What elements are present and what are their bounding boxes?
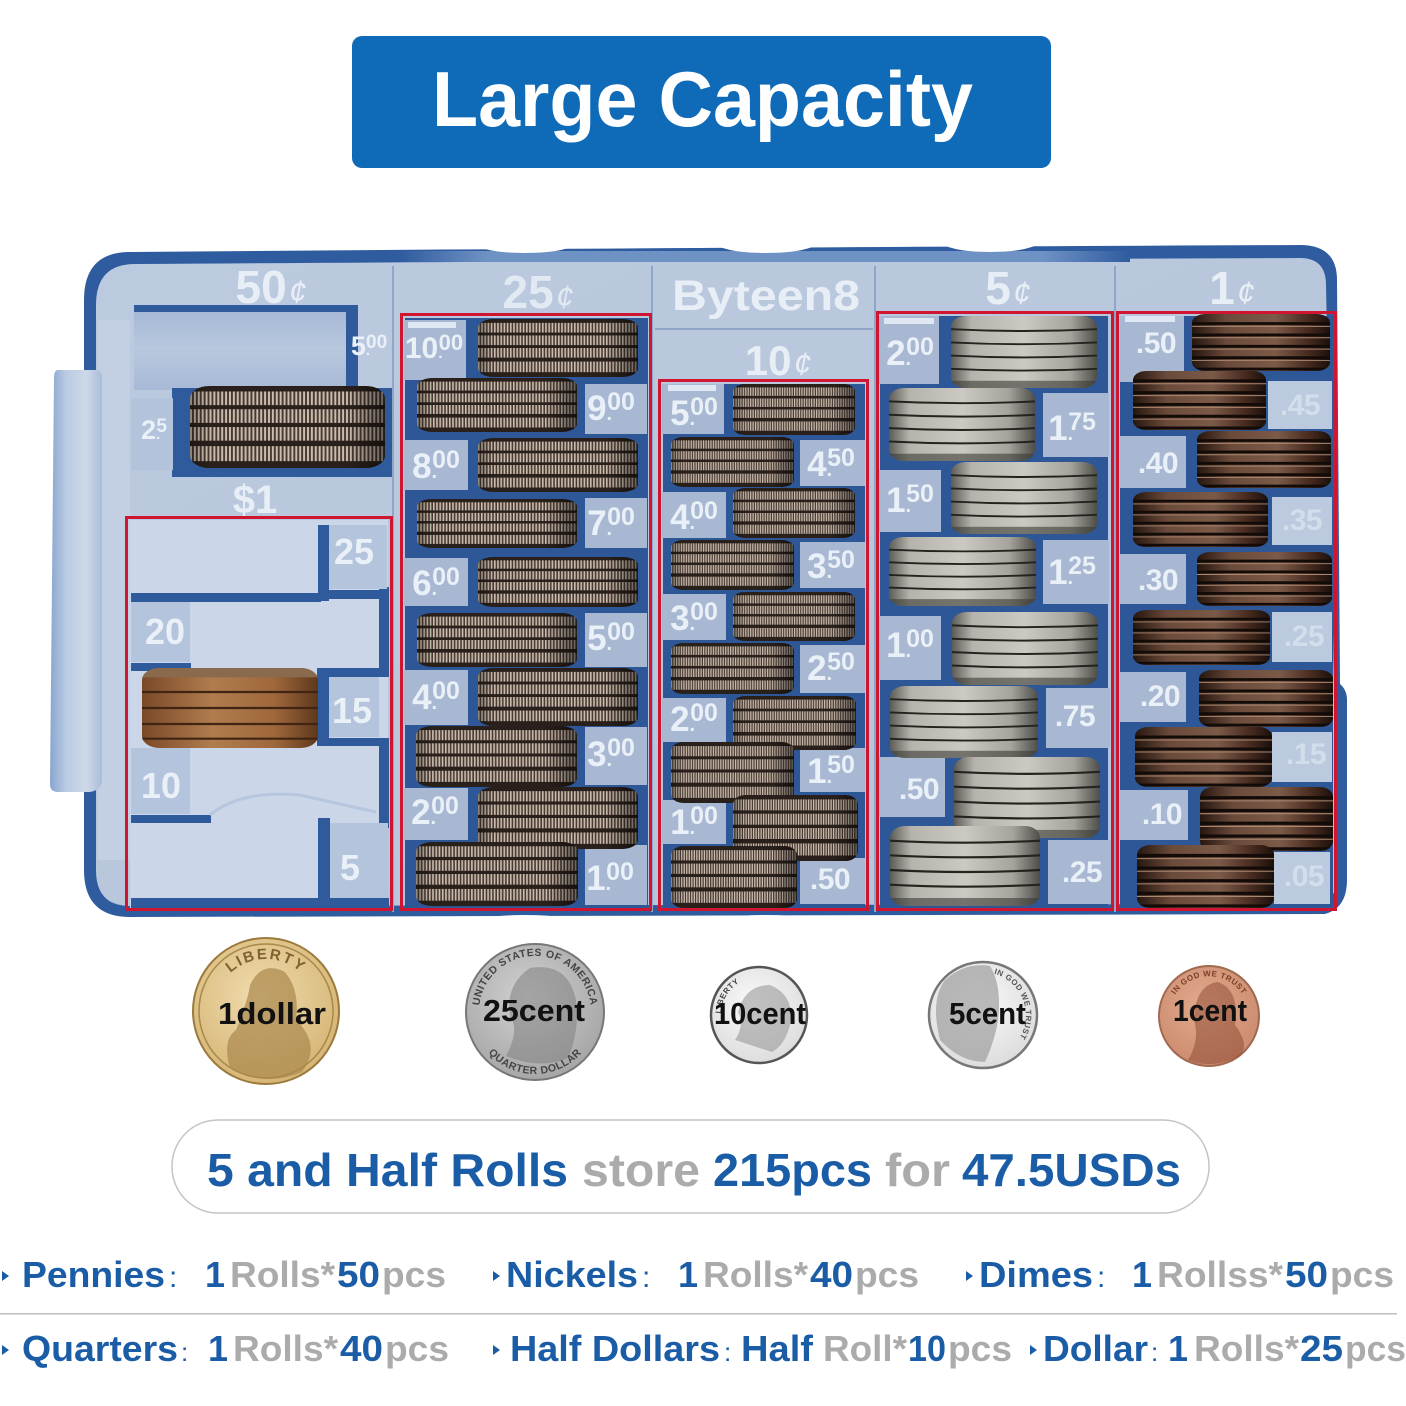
title banner: Large Capacity xyxy=(432,55,973,143)
value labels: 1. xyxy=(670,803,695,842)
value labels: 50 xyxy=(827,751,855,779)
spec: quarters: 1 xyxy=(208,1328,228,1369)
value labels: .30 xyxy=(1138,564,1178,597)
heading: 25c: 25¢ xyxy=(503,266,574,318)
value labels: 3. xyxy=(670,599,695,638)
panel: dollar coin slots xyxy=(126,518,392,910)
coin: 25 cent xyxy=(465,943,605,1081)
spec: quarters: 40 xyxy=(340,1328,383,1369)
value labels: .10 xyxy=(1142,798,1182,831)
heading: 10c: 10¢ xyxy=(745,337,811,384)
denomination labels xyxy=(141,531,374,888)
coin stacks xyxy=(889,316,1100,906)
value labels: 00 xyxy=(690,497,718,525)
coin: 25 cent: UNITED STATES OF AMERICA xyxy=(472,948,598,1005)
tray body xyxy=(84,245,1347,917)
value labels: .50 xyxy=(1136,327,1176,360)
panel: quarters column xyxy=(402,314,650,910)
value labels xyxy=(405,330,635,898)
coin tray xyxy=(50,232,1347,929)
denomination labels: 5 xyxy=(340,847,360,888)
value labels: 2. xyxy=(670,700,695,739)
value labels: 3. xyxy=(807,547,832,586)
denomination labels: 20 xyxy=(145,611,185,652)
spec: dimes: Rollss* xyxy=(1157,1254,1283,1295)
coin label: 25cent xyxy=(483,993,585,1028)
coin stack: dollars xyxy=(142,668,318,748)
spec: half dollars: : xyxy=(724,1337,731,1367)
value labels: 75 xyxy=(1068,408,1096,436)
capacity summary pill xyxy=(172,1120,1209,1213)
title banner xyxy=(352,36,1051,168)
spec: dollar: 25 xyxy=(1300,1328,1343,1369)
spec: half dollars: Roll* xyxy=(823,1328,907,1369)
value labels xyxy=(1136,327,1326,893)
spec: half dollars: Half Dollars xyxy=(510,1328,720,1369)
spec: half dollars: Half xyxy=(741,1328,814,1369)
coin label: 1dollar xyxy=(218,996,326,1031)
spec: dollar: pcs xyxy=(1345,1328,1406,1369)
red outline xyxy=(1118,312,1336,910)
spec: dollar: Dollar xyxy=(1043,1328,1148,1369)
spec: dollar: 1 xyxy=(1168,1328,1188,1369)
heading: 50c: 50¢ xyxy=(236,261,307,313)
value labels: .50 xyxy=(899,773,939,806)
spec: nickels: 1 xyxy=(678,1254,698,1295)
coin label: 10cent xyxy=(714,996,806,1031)
coin stacks xyxy=(671,384,858,908)
value labels: 2. xyxy=(807,649,832,688)
capacity summary pill: 5 and Half Rolls xyxy=(207,1144,568,1196)
spec: pennies: 50 xyxy=(337,1254,380,1295)
spec: nickels xyxy=(493,1254,919,1295)
coin: 5 cent xyxy=(928,960,1038,1070)
spec: pennies: Rolls* xyxy=(230,1254,335,1295)
value labels: 50 xyxy=(827,648,855,676)
red outline xyxy=(126,518,392,910)
spec: dollar: Rolls* xyxy=(1194,1328,1299,1369)
value labels: 00 xyxy=(432,563,460,591)
value labels: 00 xyxy=(690,802,718,830)
value labels: 7. xyxy=(587,504,612,543)
spec: nickels: Nickels xyxy=(506,1254,638,1295)
denomination labels: 10 xyxy=(141,765,181,806)
value labels: 1. xyxy=(886,481,911,520)
value labels: .15 xyxy=(1286,738,1326,771)
spec: dimes: : xyxy=(1097,1261,1105,1294)
value labels: 50 xyxy=(827,546,855,574)
coin: 1 dollar xyxy=(192,937,340,1085)
spec: dimes: Dimes xyxy=(979,1254,1093,1295)
red outline xyxy=(878,312,1112,910)
capacity summary pill: 215pcs xyxy=(713,1144,872,1196)
value labels: 1. xyxy=(886,626,911,665)
spec: pennies xyxy=(2,1254,446,1295)
coin: 10 cent xyxy=(710,966,808,1064)
value labels: 00 xyxy=(906,333,934,361)
value labels: 5. xyxy=(670,394,695,433)
spec: pennies: pcs xyxy=(382,1254,446,1295)
denomination labels: 15 xyxy=(332,690,372,731)
spec: dimes: 1 xyxy=(1132,1254,1152,1295)
value labels: 50 xyxy=(827,444,855,472)
spec: pennies: : xyxy=(169,1261,177,1294)
spec: nickels: 40 xyxy=(810,1254,853,1295)
label: 5.00: 5. xyxy=(351,331,370,361)
value labels: 8. xyxy=(412,447,437,486)
spec: nickels: : xyxy=(642,1261,650,1294)
coin stacks xyxy=(1133,314,1333,908)
value labels: 1. xyxy=(807,752,832,791)
value labels: 00 xyxy=(906,625,934,653)
spec: half dollars xyxy=(493,1328,1012,1369)
value labels: 4. xyxy=(412,678,437,717)
coin: 1 cent xyxy=(1158,965,1260,1067)
side hinge tab xyxy=(50,370,102,792)
panel: half dollar slot xyxy=(131,305,392,477)
spec: dimes: 50 xyxy=(1285,1254,1328,1295)
value labels: 00 xyxy=(432,677,460,705)
value labels: .05 xyxy=(1284,860,1324,893)
heading: 1c: 1¢ xyxy=(1209,262,1255,314)
value labels: 00 xyxy=(432,446,460,474)
coin: 5 cent: IN GOD WE TRUST xyxy=(994,968,1032,1040)
value labels: .45 xyxy=(1280,389,1320,422)
coin stacks xyxy=(416,319,638,906)
value labels: 00 xyxy=(690,598,718,626)
spec: dimes: pcs xyxy=(1330,1254,1394,1295)
coin: 10 cent: LIBERTY xyxy=(716,978,738,1014)
value labels: 2. xyxy=(411,793,436,832)
coin label: 1cent xyxy=(1173,993,1247,1028)
value labels: 2. xyxy=(886,334,911,373)
label: 5.00: 00 xyxy=(366,332,387,353)
spec: dollar xyxy=(1030,1328,1406,1369)
value labels: 00 xyxy=(606,858,634,886)
spec: half dollars: pcs xyxy=(948,1328,1012,1369)
capacity summary pill: for xyxy=(885,1144,950,1196)
value labels: .20 xyxy=(1140,680,1180,713)
spec: quarters: pcs xyxy=(385,1328,449,1369)
value labels: 25 xyxy=(1068,552,1096,580)
heading: $1: $1 xyxy=(233,478,277,522)
spec: quarters: Quarters xyxy=(22,1328,178,1369)
value labels: 00 xyxy=(690,393,718,421)
value labels: 00 xyxy=(607,503,635,531)
denomination labels: 25 xyxy=(334,531,374,572)
value labels: 50 xyxy=(906,480,934,508)
spec: nickels: Rolls* xyxy=(703,1254,808,1295)
value labels: .25 xyxy=(1284,620,1324,653)
value labels: .25 xyxy=(1062,856,1102,889)
spec: half dollars: 10 xyxy=(908,1328,946,1369)
value labels: 1. xyxy=(1048,553,1073,592)
value labels: 00 xyxy=(431,792,459,820)
spec: pennies: 1 xyxy=(205,1254,225,1295)
value labels: 1. xyxy=(586,859,611,898)
heading: 5c: 5¢ xyxy=(985,262,1031,314)
spec: dimes xyxy=(966,1254,1394,1295)
value labels: 5. xyxy=(587,619,612,658)
spec: quarters: : xyxy=(181,1337,188,1367)
spec: nickels: pcs xyxy=(855,1254,919,1295)
heading: Byteen8: Byteen8 xyxy=(672,272,860,320)
value labels: 00 xyxy=(439,330,463,355)
value labels: 4. xyxy=(807,445,832,484)
spec: quarters xyxy=(2,1328,449,1369)
panel: dimes column xyxy=(660,380,868,910)
label: 2.5: 5 xyxy=(156,416,167,437)
value labels: .75 xyxy=(1055,700,1095,733)
red outline xyxy=(660,380,868,910)
coin: 1 dollar: LIBERTY xyxy=(225,948,306,972)
value labels: .50 xyxy=(810,863,850,896)
capacity summary pill: store xyxy=(582,1144,700,1196)
coin: 25 cent: QUARTER DOLLAR xyxy=(490,1049,582,1074)
coin label: 5cent xyxy=(949,996,1026,1031)
value labels xyxy=(886,333,1102,889)
row divider xyxy=(0,1313,1397,1314)
value labels: .40 xyxy=(1138,447,1178,480)
spec: quarters: Rolls* xyxy=(233,1328,338,1369)
value labels xyxy=(670,393,855,896)
spec: dollar: : xyxy=(1151,1337,1158,1367)
value labels: 9. xyxy=(587,389,612,428)
value labels: 00 xyxy=(607,618,635,646)
value labels: 00 xyxy=(690,699,718,727)
value labels: 6. xyxy=(412,564,437,603)
column dividers xyxy=(393,266,1115,912)
spec: pennies: Pennies xyxy=(22,1254,165,1295)
value labels: 3. xyxy=(587,735,612,774)
value labels: 00 xyxy=(607,388,635,416)
value labels: 10. xyxy=(405,332,443,365)
panel: pennies column xyxy=(1118,312,1336,910)
value labels: 4. xyxy=(670,498,695,537)
label: 2.5: 2. xyxy=(141,415,160,445)
value labels: 00 xyxy=(607,734,635,762)
top and bottom notches xyxy=(475,232,1038,929)
capacity summary pill: 47.5USDs xyxy=(962,1144,1181,1196)
panel: nickels column xyxy=(878,312,1112,910)
coin: 1 cent: IN GOD WE TRUST xyxy=(1171,970,1247,994)
red outline xyxy=(402,314,650,910)
value labels: .35 xyxy=(1282,504,1322,537)
value labels: 1. xyxy=(1048,409,1073,448)
